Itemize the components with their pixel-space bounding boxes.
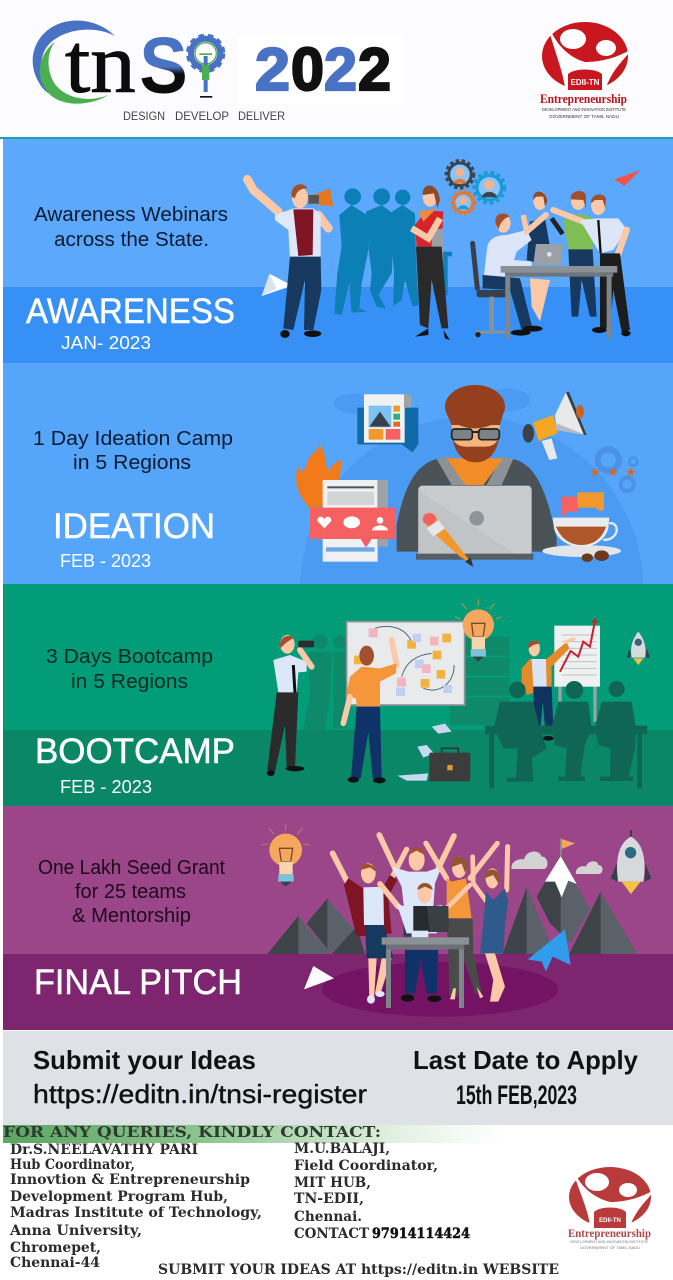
woman in navy dress — [523, 191, 550, 322]
binocular man — [267, 635, 314, 776]
monitor and desk — [382, 906, 469, 1008]
contact: field coordinator — [294, 1141, 470, 1242]
panel: bootcamp — [3, 584, 673, 806]
logo: EDII-TN emblem: Entrepreneurship — [540, 92, 627, 106]
contact: field coordinator: Chennai. — [294, 1209, 362, 1225]
logo: 2022 — [255, 36, 391, 103]
contact: hub coordinator: Anna University, — [9, 1223, 142, 1239]
contact: hub coordinator: Hub Coordinator, — [10, 1157, 135, 1173]
tagline: DEVELOP — [175, 111, 229, 123]
contact: hub coordinator — [9, 1142, 262, 1271]
bearded man — [397, 385, 557, 552]
bootcamp description: 3 Days Bootcamp — [46, 646, 213, 668]
logo: EDII-TN emblem small: Entrepreneurship — [568, 1228, 651, 1240]
final pitch description: One Lakh Seed Grant — [38, 857, 225, 879]
pencil — [423, 513, 473, 567]
whiteboard — [347, 622, 465, 705]
blue paper plane — [528, 929, 571, 972]
final pitch heading: FINAL PITCH — [34, 963, 242, 1002]
panel: contact — [0, 1123, 673, 1280]
logo: EDII-TN emblem: DEVELOPMENT AND INNOVATION INSTITUTE — [542, 107, 626, 113]
gears — [446, 161, 505, 214]
document and social bubble — [310, 480, 395, 562]
man in light shirt — [379, 835, 454, 937]
final pitch description: & Mentorship — [72, 905, 191, 927]
tagline: DESIGN — [123, 111, 165, 123]
panel: final pitch — [3, 806, 673, 1030]
contact: field coordinator: TN-EDII, — [294, 1191, 364, 1207]
bootcamp heading: BOOTCAMP — [35, 732, 235, 771]
ideation description — [33, 428, 233, 474]
logo: 2022: 2 — [324, 36, 357, 103]
bootcamp description: in 5 Regions — [71, 671, 188, 693]
illustration: team with megaphone — [247, 161, 641, 340]
stars and gears — [589, 449, 637, 491]
panel: ideation — [3, 363, 673, 584]
logo: EDII-TN emblem: EDII-TN — [571, 78, 600, 87]
bootcamp date: FEB - 2023 — [60, 777, 152, 797]
silhouettes — [334, 188, 452, 315]
submit your ideas: Submit your Ideas — [33, 1045, 256, 1075]
awareness description — [34, 204, 228, 251]
logo: 2022: 0 — [291, 36, 324, 103]
logo: tnSi — [33, 17, 223, 111]
panel: submit and last date — [3, 1031, 673, 1125]
contact: hub coordinator: Development Program Hub, — [10, 1189, 228, 1205]
illustration: celebrating team — [262, 824, 651, 1017]
background shadows — [303, 634, 509, 730]
papers and briefcase — [397, 724, 470, 781]
website line: SUBMIT YOUR IDEAS AT https://editn.in WEBSITE — [158, 1262, 559, 1278]
awareness date: JAN- 2023 — [61, 333, 151, 353]
ideation heading: IDEATION — [53, 507, 215, 546]
man in tie — [553, 194, 631, 336]
logo: EDII-TN emblem small: EDII-TN — [599, 1218, 621, 1224]
logo: 2022: 2 — [358, 36, 391, 103]
flame — [296, 444, 341, 508]
megaphone — [523, 392, 587, 460]
rocket — [611, 830, 651, 894]
seated man and desk — [473, 213, 546, 337]
contact: hub coordinator: Dr.S.NEELAVATHY PARI — [10, 1142, 198, 1158]
registration url: https://editn.in/tnsi-register — [33, 1079, 367, 1109]
awareness description: Awareness Webinars — [34, 204, 228, 226]
audience silhouettes — [485, 681, 647, 788]
awareness description: across the State. — [54, 229, 209, 251]
logo: tnSi: tn — [65, 17, 136, 111]
stars and gears: ★ — [589, 464, 601, 479]
coffee cup — [542, 492, 621, 562]
tagline: DELIVER — [238, 111, 285, 123]
contact: hub coordinator: Chromepet, — [10, 1240, 101, 1256]
logo: EDII-TN emblem small: DEVELOPMENT AND INNOVATION INSTITUTE — [570, 1240, 648, 1244]
logo: EDII-TN emblem — [540, 22, 633, 120]
final pitch description: for 25 teams — [75, 881, 186, 903]
stars and gears: ★ — [625, 464, 636, 479]
woman in green top — [552, 191, 597, 317]
contact: field coordinator: 97914114424 — [372, 1226, 470, 1242]
man at computer — [380, 883, 470, 1002]
logo: tnSi: S — [139, 21, 188, 110]
light bulb — [455, 599, 502, 662]
man in red jacket — [333, 849, 407, 1004]
logo: 2022: 2 — [255, 36, 290, 103]
awareness heading: AWARENESS — [26, 292, 235, 331]
man with megaphone — [247, 179, 333, 338]
final pitch description — [38, 857, 225, 927]
bootcamp description — [46, 646, 213, 693]
rocket — [627, 632, 650, 665]
mountains — [267, 855, 637, 954]
illustration: bearded man at laptop — [296, 385, 643, 584]
woman in blue dress — [473, 847, 508, 1002]
contact heading: FOR ANY QUERIES, KINDLY CONTACT: — [3, 1123, 381, 1141]
ideation description: in 5 Regions — [73, 452, 191, 474]
date value: 15th FEB,2023 — [456, 1080, 577, 1110]
ideation description: 1 Day Ideation Camp — [33, 428, 233, 450]
logo: EDII-TN emblem: GOVERNMENT OF TAMIL NADU — [549, 114, 620, 120]
man at whiteboard — [343, 640, 397, 783]
stars and gears: ★ — [607, 464, 619, 479]
flag and clouds — [511, 838, 603, 874]
laptop — [416, 486, 533, 560]
contact: field coordinator: MIT HUB, — [294, 1175, 371, 1191]
flip chart with presenter — [522, 618, 600, 742]
laptop on desk — [501, 244, 617, 338]
illustration: team at whiteboard — [267, 599, 650, 788]
panel: awareness — [3, 139, 673, 363]
last date: Last Date to Apply — [413, 1045, 639, 1075]
header band — [0, 0, 673, 139]
logo: EDII-TN emblem small: GOVERNMENT OF TAMIL NADU — [580, 1246, 640, 1250]
ideation date: FEB - 2023 — [60, 551, 151, 571]
contact: field coordinator: Field Coordinator, — [294, 1158, 438, 1174]
light bulb — [262, 824, 309, 887]
contact: hub coordinator: Chennai-44 — [10, 1255, 100, 1271]
tagline — [123, 111, 285, 123]
contact: hub coordinator: Innovtion & Entrepreneurship — [10, 1172, 250, 1188]
woman with glasses — [412, 186, 450, 340]
contact: field coordinator: M.U.BALAJI, — [294, 1141, 390, 1157]
contact: field coordinator: CONTACT — [294, 1226, 369, 1242]
contact: hub coordinator: Madras Institute of Technology, — [10, 1205, 262, 1221]
white paper plane — [304, 966, 334, 989]
woman in orange top — [426, 843, 497, 999]
newspaper — [357, 394, 418, 452]
logo: EDII-TN emblem small — [568, 1167, 657, 1250]
